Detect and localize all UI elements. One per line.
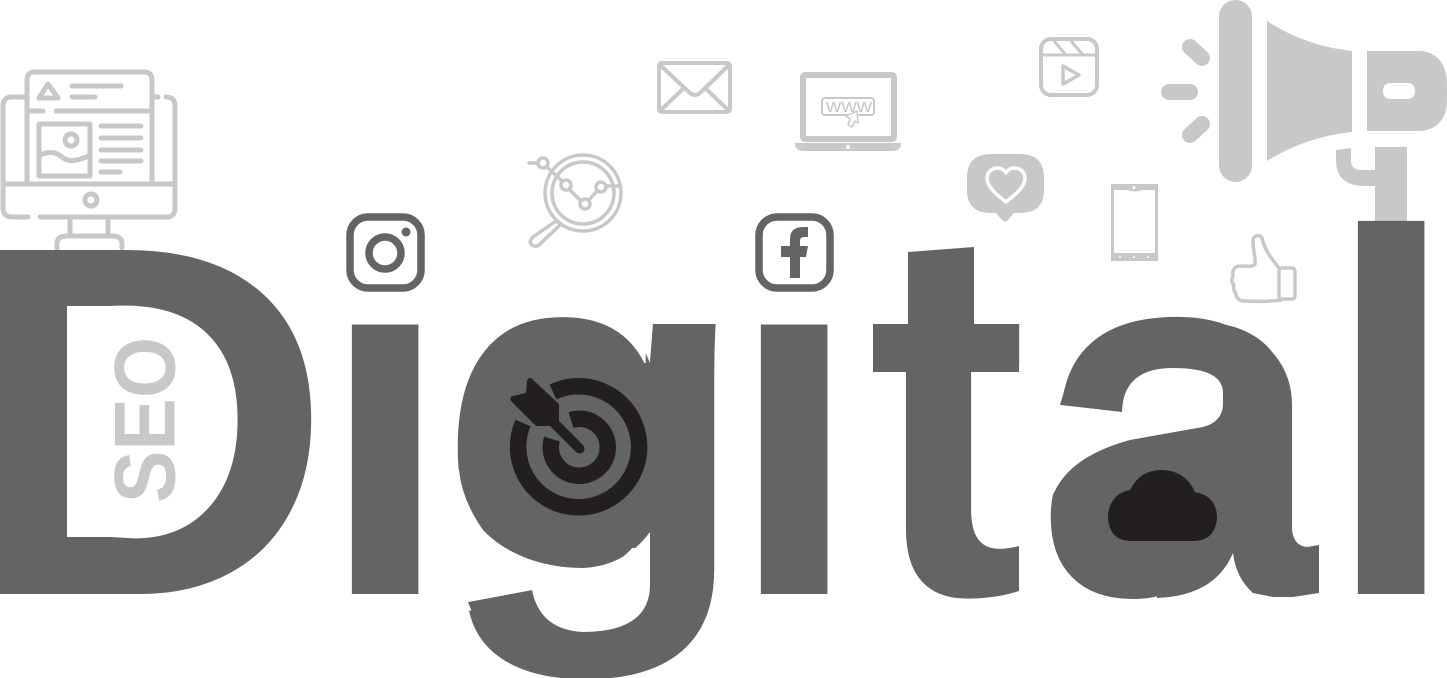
icon: cloud — [1108, 470, 1217, 541]
letter g: g — [437, 140, 750, 678]
icon: video clapper reel — [1041, 39, 1097, 95]
icon: laptop with www — [795, 75, 901, 151]
icon: smartphone — [1111, 184, 1158, 261]
icon: thumbs up — [1232, 236, 1295, 301]
icon: magnifying glass with chart — [529, 155, 621, 246]
label: SEO: SEO — [98, 337, 194, 503]
icon: facebook — [759, 217, 830, 288]
icon: heart speech bubble — [967, 154, 1044, 222]
icon: megaphone — [1169, 0, 1447, 222]
icon: target with arrow — [510, 378, 639, 507]
icon: instagram — [350, 217, 421, 288]
icon: envelope — [659, 63, 730, 112]
icon: monitor with web page — [3, 72, 175, 248]
icon: laptop with www: www — [825, 96, 873, 116]
